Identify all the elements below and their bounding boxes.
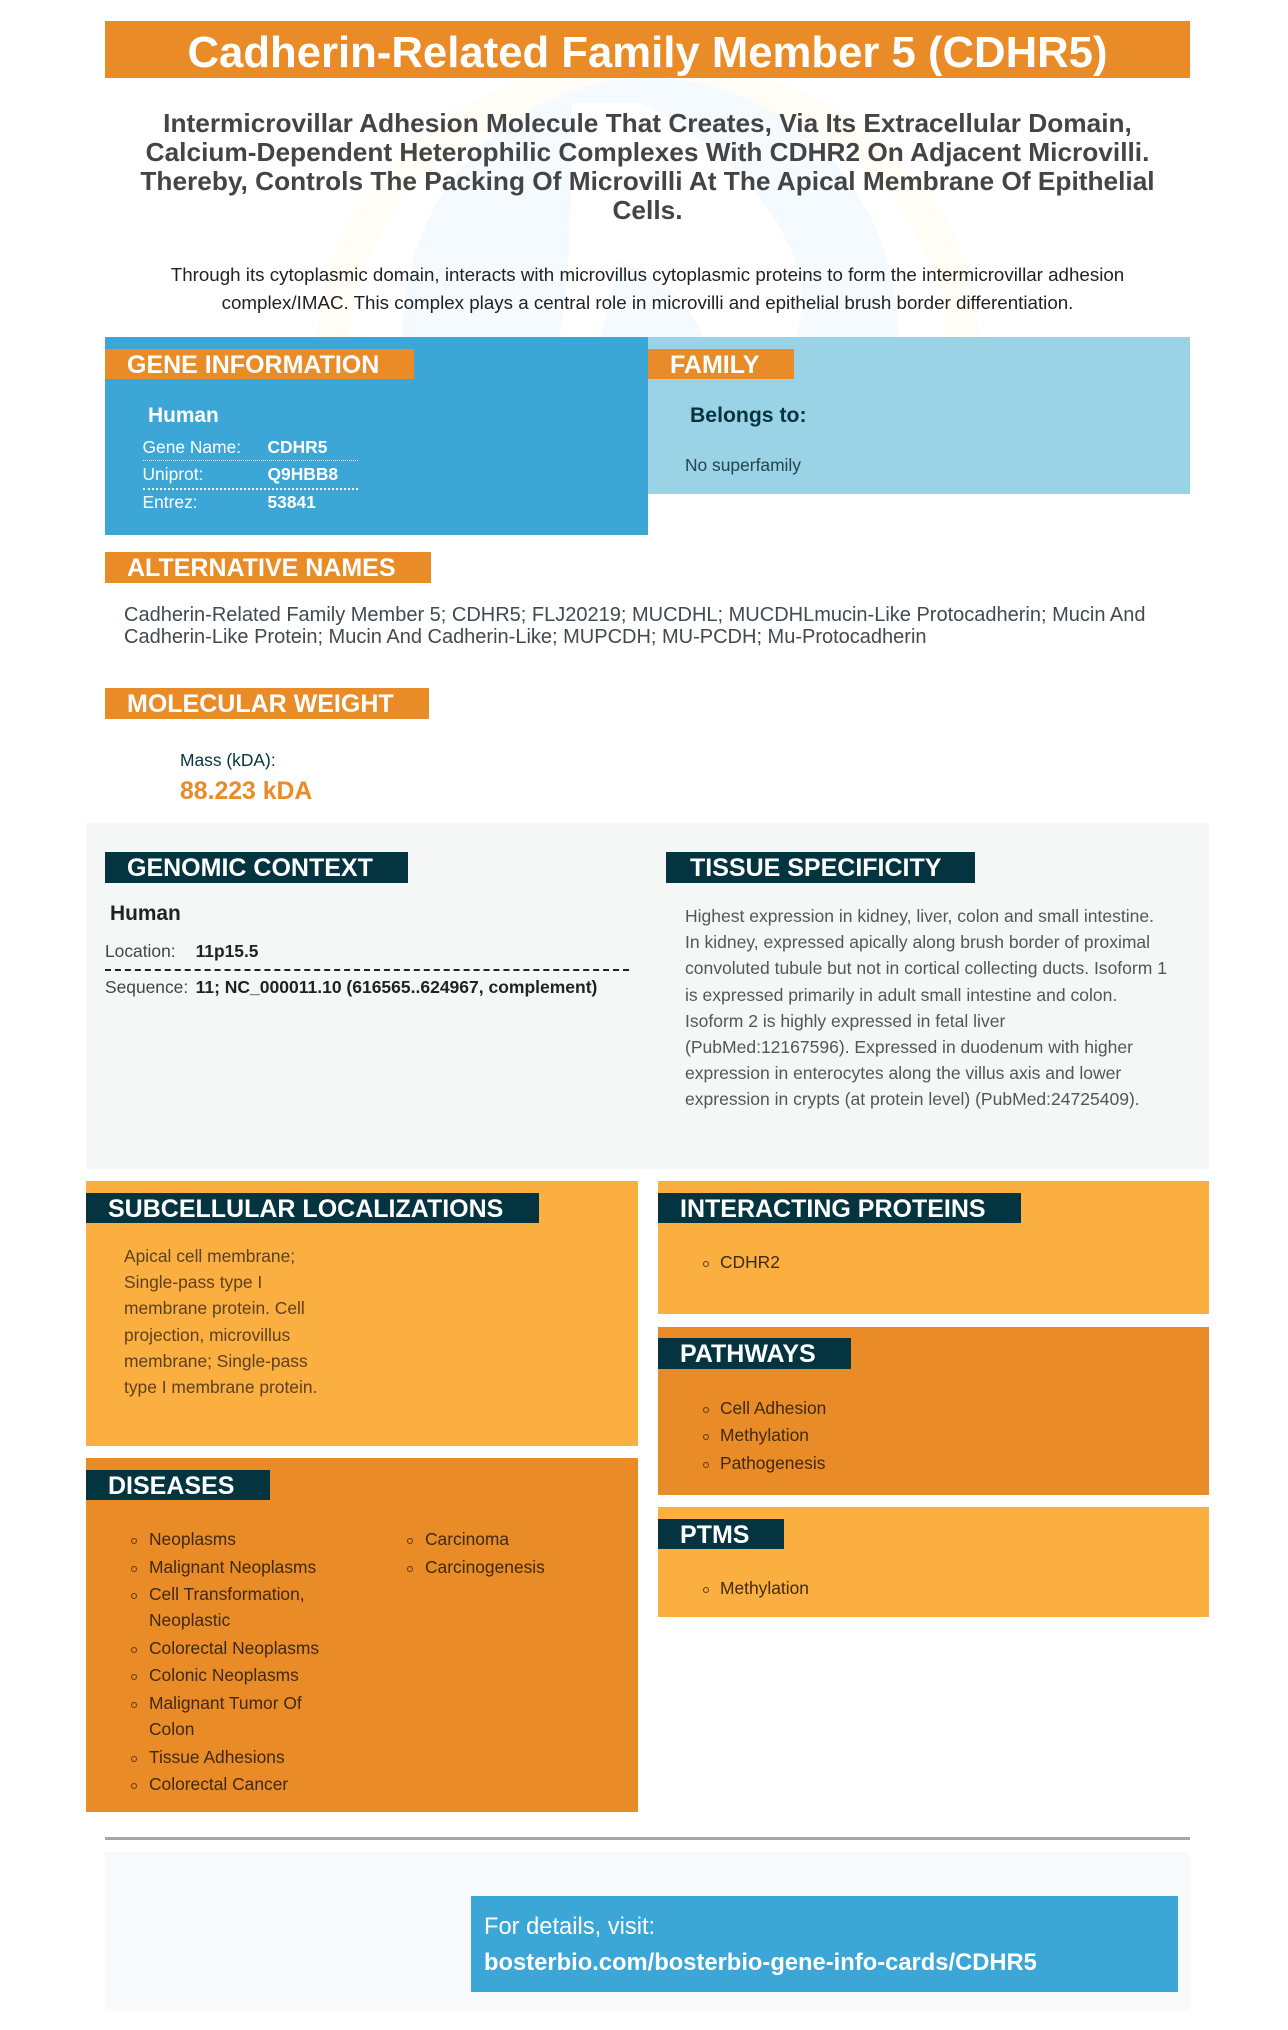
entrez row: Entrez: <box>142 492 198 512</box>
alternative names text <box>124 604 1145 648</box>
pathways list: Methylation <box>720 1425 809 1445</box>
localization text: Apical cell membrane; <box>124 1246 295 1266</box>
heading: tissue specificity: TISSUE SPECIFICITY <box>690 854 941 882</box>
uniprot row: Q9HBB8 <box>268 464 338 484</box>
sequence row: 11; NC_000011.10 (616565..624967, complement) <box>196 977 597 997</box>
subtitle: Intermicrovillar Adhesion Molecule That Creates, Via Its Extracellular Domain, <box>163 108 1132 138</box>
intro paragraph: complex/IMAC. This complex plays a central role in microvilli and epithelial brush border differentiation. <box>222 292 1073 313</box>
heading: diseases: DISEASES <box>108 1472 234 1500</box>
gene name row: CDHR5 <box>268 437 327 457</box>
callout: details link <box>471 1896 1178 1992</box>
species label: Human <box>110 902 181 925</box>
diseases list column 1: Malignant Neoplasms <box>149 1557 316 1577</box>
background watermark logo <box>318 78 978 337</box>
pathways list <box>703 1398 826 1473</box>
heading: subcellular localizations: SUBCELLULAR LOCALIZATIONS <box>108 1195 503 1223</box>
diseases list column 1: Colorectal Cancer <box>149 1774 288 1794</box>
diseases list column 1: Colorectal Neoplasms <box>149 1638 319 1658</box>
subtitle: Cells. <box>612 195 683 225</box>
diseases list column 1: Cell Transformation, <box>149 1584 305 1604</box>
pathways list: Cell Adhesion <box>720 1398 826 1418</box>
diseases list column 2 <box>407 1529 545 1577</box>
tissue specificity text: Highest expression in kidney, liver, colon and small intestine. <box>685 906 1154 926</box>
diseases list column 2: Carcinoma <box>425 1529 509 1549</box>
intro paragraph <box>171 264 1124 313</box>
tissue specificity text: convoluted tubule but not in cortical collecting ducts. Isoform 1 <box>685 958 1167 978</box>
heading: pathways: PATHWAYS <box>680 1340 816 1368</box>
localization text <box>124 1246 317 1397</box>
diseases list column 1: Colon <box>149 1719 194 1739</box>
details label: For details, visit: <box>484 1914 655 1940</box>
alternative names text: Cadherin-Like Protein; Mucin And Cadherin-Like; MUPCDH; MU-PCDH; Mu-Protocadherin <box>124 626 927 648</box>
heading: genomic context: GENOMIC CONTEXT <box>127 854 373 882</box>
diseases list column 1: Tissue Adhesions <box>149 1747 285 1767</box>
location row <box>105 943 629 971</box>
panel: footer <box>105 1852 1190 2011</box>
heading: ptms: PTMS <box>680 1521 749 1549</box>
diseases list column 1: Malignant Tumor Of <box>149 1693 302 1713</box>
tissue specificity text: In kidney, expressed apically along brush border of proximal <box>685 932 1150 952</box>
sequence row: Sequence: <box>105 977 188 997</box>
molecular mass <box>180 750 312 805</box>
heading: family <box>648 349 794 379</box>
diseases list column 1: Colonic Neoplasms <box>149 1665 299 1685</box>
panel: gene information <box>105 337 648 535</box>
belongs to label: Belongs to: <box>690 404 807 427</box>
panel: subcellular localizations <box>86 1181 638 1446</box>
heading: diseases <box>86 1470 270 1500</box>
heading: pathways <box>658 1338 851 1369</box>
heading: molecular weight: MOLECULAR WEIGHT <box>127 690 394 718</box>
panel: genomic context and tissue specificity <box>86 823 1209 1169</box>
subtitle: Calcium-Dependent Heterophilic Complexes With CDHR2 On Adjacent Microvilli. <box>146 137 1149 167</box>
diseases list column 1: Neoplasms <box>149 1529 236 1549</box>
location row: 11p15.5 <box>196 941 258 961</box>
heading: interacting proteins: INTERACTING PROTEINS <box>680 1195 986 1223</box>
panel: pathways <box>658 1327 1209 1495</box>
intro paragraph: Through its cytoplasmic domain, interacts with microvillus cytoplasmic proteins to form the intermicrovillar adhesion <box>171 264 1124 285</box>
title banner: Cadherin-Related Family Member 5 (CDHR5) <box>187 28 1108 77</box>
localization text: type I membrane protein. <box>124 1377 317 1397</box>
diseases list column 2: Carcinogenesis <box>425 1557 545 1577</box>
tissue specificity text: (PubMed:12167596). Expressed in duodenum with higher <box>685 1037 1133 1057</box>
localization text: Single-pass type I <box>124 1272 262 1292</box>
uniprot row <box>142 466 358 490</box>
tissue specificity text: is expressed primarily in adult small intestine and colon. <box>685 985 1117 1005</box>
tissue specificity text <box>685 906 1167 1109</box>
localization text: membrane protein. Cell <box>124 1298 305 1318</box>
mass label: Mass (kDA): <box>180 750 276 770</box>
gene name row <box>142 439 358 461</box>
tissue specificity text: expression in crypts (at protein level) (PubMed:24725409). <box>685 1089 1140 1109</box>
superfamily value: No superfamily <box>685 455 801 475</box>
localization text: membrane; Single-pass <box>124 1351 308 1371</box>
heading: family: FAMILY <box>670 351 759 379</box>
diseases list column 1 <box>131 1529 319 1794</box>
subtitle <box>140 108 1155 225</box>
ptms list: Methylation <box>720 1578 809 1598</box>
interacting proteins list: CDHR2 <box>720 1252 780 1272</box>
mass value: 88.223 kDA <box>180 778 312 805</box>
panel: interacting proteins <box>658 1181 1209 1314</box>
diseases list column 1: Neoplastic <box>149 1610 230 1630</box>
heading: alternative names: ALTERNATIVE NAMES <box>127 554 396 582</box>
gene name row: Gene Name: <box>142 437 241 457</box>
tissue specificity text: expression in enterocytes along the villus axis and lower <box>685 1063 1121 1083</box>
panel: diseases <box>86 1458 638 1812</box>
localization text: projection, microvillus <box>124 1325 290 1345</box>
details url: bosterbio.com/bosterbio-gene-info-cards/CDHR5 <box>484 1949 1037 1976</box>
entrez row <box>142 492 316 512</box>
tissue specificity text: Isoform 2 is highly expressed in fetal liver <box>685 1011 1005 1031</box>
heading: gene information: GENE INFORMATION <box>127 351 379 379</box>
alternative names text: Cadherin-Related Family Member 5; CDHR5; FLJ20219; MUCDHL; MUCDHLmucin-Like Protocadherin; Mucin And <box>124 604 1145 626</box>
species label: Human <box>148 404 219 427</box>
subtitle: Thereby, Controls The Packing Of Microvilli At The Apical Membrane Of Epithelial <box>140 166 1155 196</box>
pathways list: Pathogenesis <box>720 1453 825 1473</box>
uniprot row: Uniprot: <box>142 464 203 484</box>
location row: Location: <box>105 941 176 961</box>
panel: family <box>648 337 1190 494</box>
heading: ptms <box>658 1519 784 1549</box>
panel: ptms <box>658 1507 1209 1617</box>
entrez row: 53841 <box>268 492 316 512</box>
